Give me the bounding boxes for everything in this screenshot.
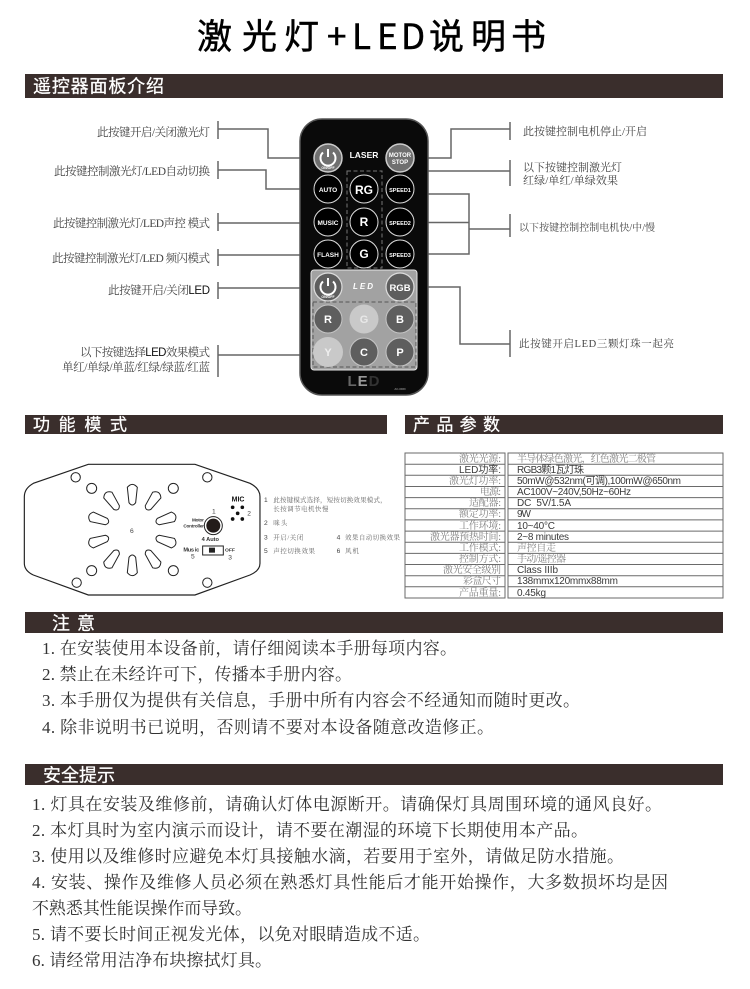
MIC: 2	[247, 511, 251, 518]
table values: 手动/遥控器	[517, 552, 566, 565]
table values: 10~40°C	[517, 521, 555, 532]
device legend: 6	[337, 548, 341, 555]
heading: function modes	[25, 415, 387, 434]
LED panel: P	[396, 347, 404, 359]
callout: motor speed	[414, 194, 655, 254]
callout: laser effects: 以下按键控制激光灯	[523, 160, 622, 174]
notes list	[42, 639, 580, 737]
table values: Class IIIb	[517, 565, 558, 576]
heading: remote panel intro	[25, 74, 723, 98]
laser buttons: AUTO	[319, 187, 337, 194]
table values: 50mW@532nm(可调),100mW@650nm	[517, 475, 681, 487]
callout: motor stop: 此按键控制电机停止/开启	[523, 124, 647, 138]
notes list: 4. 除非说明书已说明，否则请不要对本设备随意改造修正。	[42, 718, 494, 737]
table labels: 彩盒尺寸	[463, 574, 501, 587]
safety list: 3. 使用以及维修时应避免本灯具接触水滴，若要用于室外，请做足防水措施。	[32, 847, 624, 866]
table values: 2~8 minutes	[517, 532, 569, 543]
device legend: 长按调节电机快慢	[273, 504, 329, 513]
heading: notes	[25, 610, 723, 636]
safety list: 不熟悉其性能误操作而导致。	[32, 898, 252, 918]
LED panel: G	[360, 314, 368, 326]
table labels: LED功率:	[459, 463, 501, 476]
LED panel: LED	[353, 282, 375, 291]
table labels: 额定功率:	[459, 507, 501, 520]
device panel diagram	[24, 464, 260, 595]
table values: AC100V~240V,50Hz~60Hz	[517, 487, 631, 498]
table labels: 激光灯功率:	[449, 474, 501, 487]
spec table	[405, 452, 723, 599]
callout: LED effect modes: 单红/单绿/单蓝/红绿/绿蓝/红蓝	[62, 360, 210, 374]
callout: laser power: 此按键开启/关闭激光灯	[97, 125, 210, 139]
laser buttons: SPEED3	[389, 253, 411, 259]
callout: LED power: 此按键开启/关闭LED	[108, 283, 210, 297]
notes list: 1. 在安装使用本设备前，请仔细阅读本手册每项内容。	[42, 639, 457, 658]
callout: motor speed: 以下按键控制控制电机快/中/慢	[519, 221, 655, 234]
right callouts	[382, 122, 674, 357]
callout: laser power	[97, 121, 314, 158]
laser buttons: FLASH	[317, 252, 339, 259]
LED panel: ON/OFF	[321, 295, 335, 299]
fan vents	[87, 484, 177, 576]
LED logo: AC-6060	[394, 387, 406, 391]
MIC	[231, 496, 251, 521]
laser buttons: STOP	[392, 160, 408, 166]
heading: product parameters	[405, 415, 723, 434]
switch: 3	[228, 555, 232, 562]
notes list: 2. 禁止在未经许可下，传播本手册内容。	[42, 665, 352, 684]
LED panel: R	[324, 314, 332, 326]
LED panel	[311, 270, 417, 370]
mounting holes	[71, 473, 212, 587]
safety list: 2. 本灯具时为室内演示而设计，请不要在潮湿的环境下长期使用本产品。	[32, 821, 588, 840]
notes list: 3. 本手册仅为提供有关信息，手册中所有内容会不经通知而随时更改。	[42, 691, 580, 710]
controller knob: Motor	[192, 518, 204, 523]
LED panel: Y	[324, 347, 332, 359]
laser buttons: MOTOR	[389, 153, 412, 159]
laser buttons: RG	[355, 183, 373, 197]
MIC: MIC	[232, 496, 244, 503]
table values: 9W	[517, 509, 532, 520]
switch: 5	[191, 554, 195, 561]
device legend: 此按键模式选择，短按切换效果模式，	[273, 495, 387, 504]
callout: flash: 此按键控制激光灯/LED 频闪模式	[52, 251, 210, 265]
table values: 半导体绿色激光，红色激光二极管	[517, 452, 656, 465]
laser buttons: G	[359, 247, 369, 261]
LED panel: B	[396, 314, 404, 326]
device outline	[24, 464, 260, 595]
LED panel: RGB	[389, 283, 411, 294]
callout: music	[53, 213, 314, 231]
table values: 0.45kg	[517, 588, 546, 599]
controller knob: Controller	[183, 523, 204, 528]
heading: safety tips: 安全提示	[43, 762, 115, 788]
controller knob: 4 Auto	[202, 537, 220, 543]
callout: LED power	[108, 282, 311, 299]
table labels: 适配器:	[469, 497, 501, 509]
callout: music: 此按键控制激光灯/LED声控 模式	[53, 216, 210, 230]
callout: auto	[54, 161, 314, 189]
table labels: 激光光源:	[459, 452, 501, 465]
laser buttons: MUSIC	[318, 220, 339, 227]
table values: 138mmx120mmx88mm	[517, 576, 618, 587]
LED logo: LED	[347, 373, 381, 390]
switch: Mus ic	[183, 548, 199, 554]
safety list: 6. 请经常用洁净布块擦拭灯具。	[32, 951, 272, 970]
callout: laser effects: 红绿/单红/单绿效果	[523, 173, 618, 187]
callout: LED effect modes	[62, 345, 311, 377]
device legend: 效果自动切换效果	[345, 532, 400, 541]
device legend: 5	[264, 548, 268, 555]
table values: RGB3颗1瓦灯珠	[517, 463, 584, 476]
callout: LED effect modes: 以下按键选择LED效果模式	[80, 345, 210, 359]
callout: RGB: 此按键开启LED三颗灯珠一起亮	[519, 337, 674, 350]
safety list: 1. 灯具在安装及维修前，请确认灯体电源断开。请确保灯具周围环境的通风良好。	[32, 795, 662, 814]
laser buttons: ON/OFF	[321, 166, 335, 170]
device legend	[264, 495, 400, 555]
table values: 声控自走	[517, 541, 556, 554]
remote control	[300, 119, 428, 395]
table labels: 激光安全级别	[443, 563, 501, 576]
table grid	[405, 453, 723, 598]
callout: laser effects	[382, 160, 622, 187]
table labels: 工作环境:	[459, 519, 501, 532]
LED panel: C	[360, 347, 368, 359]
switch: OFF	[225, 547, 235, 553]
title: 激光灯+LED说明书	[197, 9, 546, 60]
callout: auto: 此按键控制激光灯/LED自动切换	[54, 164, 210, 178]
device legend: 开启/关闭	[273, 532, 304, 541]
device legend: 4	[337, 534, 341, 541]
device legend: 咪头	[273, 518, 288, 527]
left callouts	[52, 121, 314, 377]
heading: remote panel intro: 遥控器面板介绍	[33, 76, 164, 96]
laser buttons	[314, 144, 414, 268]
laser buttons: LASER	[350, 150, 378, 160]
device legend: 3	[264, 534, 268, 541]
device legend: 2	[264, 520, 268, 527]
heading: notes: 注意	[52, 610, 95, 636]
table labels: 电源:	[480, 485, 501, 498]
table labels: 产品重量:	[459, 586, 501, 599]
table labels: 控制方式:	[459, 552, 501, 565]
switch	[183, 546, 235, 562]
table values: DC 5V/1.5A	[517, 498, 571, 509]
heading: safety tips	[25, 762, 723, 788]
table labels: 工作模式:	[459, 541, 501, 554]
callout: motor stop	[414, 122, 647, 158]
laser buttons: SPEED2	[389, 221, 411, 227]
table values	[517, 452, 681, 599]
table labels: 激光器预热时间:	[430, 530, 501, 543]
LED logo	[347, 373, 406, 391]
controller knob	[183, 508, 222, 543]
controller knob: 1	[212, 508, 216, 515]
device legend: 声控切换效果	[273, 546, 315, 555]
device legend: 风机	[345, 546, 359, 555]
fan label: 6	[130, 528, 134, 535]
device legend: 1	[264, 497, 268, 504]
callout: flash	[52, 249, 314, 266]
callout: RGB	[417, 287, 674, 357]
table labels	[430, 452, 501, 599]
heading: function modes: 功能模式	[33, 416, 127, 434]
heading: product parameters: 产品参数	[413, 416, 500, 434]
laser buttons: R	[360, 215, 369, 229]
safety list: 5. 请不要长时间正视发光体，以免对眼睛造成不适。	[32, 925, 430, 944]
safety list	[32, 795, 668, 970]
safety list: 4. 安装、操作及维修人员必须在熟悉灯具性能后才能开始操作，大多数损坏均是因	[32, 873, 668, 892]
remote body	[300, 119, 428, 395]
laser buttons: SPEED1	[389, 188, 411, 194]
